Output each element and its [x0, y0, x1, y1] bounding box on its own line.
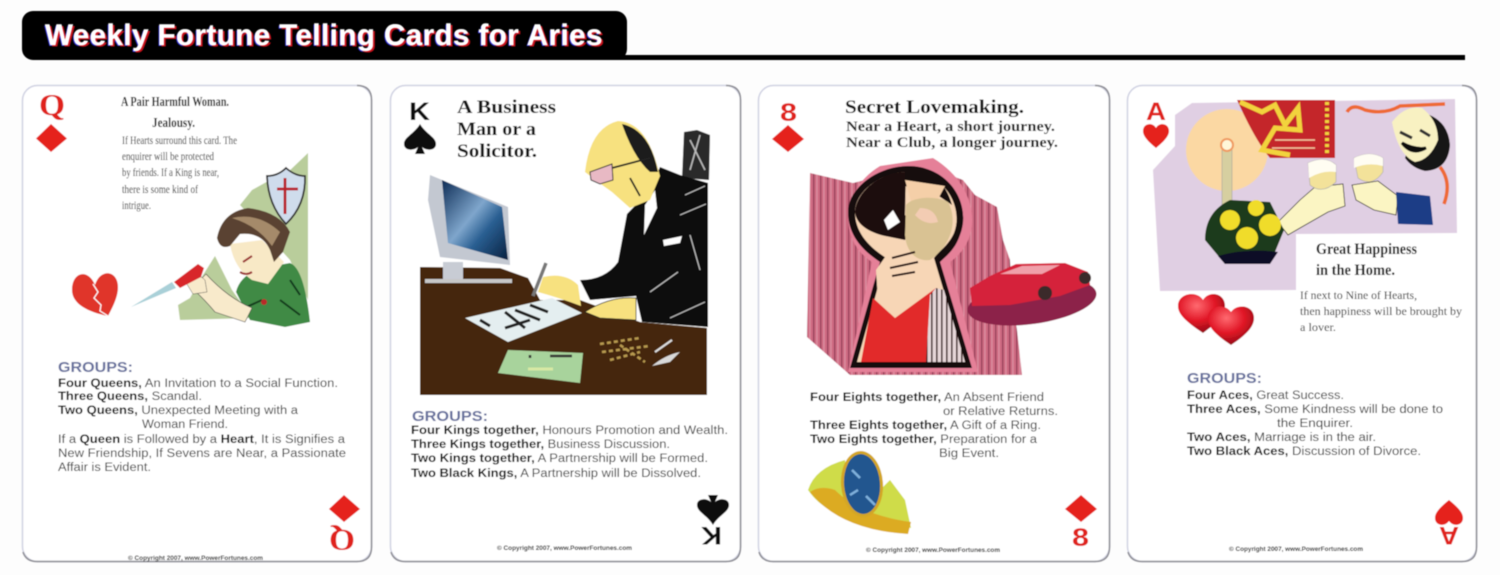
card heading: Jealousy.	[152, 116, 195, 131]
card index: A heart	[1143, 98, 1169, 148]
groups text: If a Queen is Followed by a Heart , It is Signifies a	[58, 434, 346, 446]
groups text: Three Kings together, Business Discussion.	[411, 439, 670, 451]
card description	[1300, 288, 1462, 334]
card description: there is some kind of	[122, 184, 198, 196]
groups text: Big Event.	[939, 448, 999, 460]
groups text: GROUPS:	[412, 408, 488, 425]
bottom index: rotated K spade: K	[701, 521, 722, 549]
groups text	[58, 359, 346, 474]
bottom index: rotated 8 diamond: 8	[1072, 524, 1089, 552]
bottom index: rotated 8 diamond	[1065, 495, 1097, 552]
groups text: Four Eights together, An Absent Friend	[810, 392, 1044, 404]
card description: If Hearts surround this card. The	[122, 135, 237, 147]
panel: king of spades card	[390, 86, 740, 562]
title bar	[22, 11, 1465, 60]
groups text: Three Aces, Some Kindness will be done to	[1187, 404, 1443, 416]
card description	[122, 135, 237, 212]
groups text: Four Aces, Great Success.	[1187, 390, 1344, 402]
bottom index: rotated K spade	[697, 495, 729, 549]
icon: sapphire ring	[808, 450, 911, 534]
card index: A heart: A	[1146, 98, 1166, 126]
copyright: © Copyright 2007, www.PowerFortunes.com	[128, 555, 263, 562]
card description: a lover.	[1300, 320, 1336, 334]
card heading: Solicitor.	[457, 142, 537, 162]
card description: If next to Nine of Hearts,	[1300, 288, 1417, 302]
groups text: Three Eights together, A Gift of a Ring.	[810, 420, 1041, 432]
groups text: Two Queens, Unexpected Meeting with a	[58, 405, 299, 417]
copyright: © Copyright 2007, www.PowerFortunes.com	[866, 547, 1000, 554]
groups text: Two Aces, Marriage is in the air.	[1187, 432, 1376, 444]
card heading: Man or a	[457, 120, 536, 140]
groups text: Two Black Kings, A Partnership will be Dissolved.	[411, 468, 701, 480]
groups text: GROUPS:	[1187, 370, 1262, 387]
card description: by friends. If a King is near,	[122, 167, 219, 179]
card index: 8 diamond: 8	[780, 99, 797, 127]
illustration: woman with dagger	[131, 153, 310, 327]
illustration: toast by candlelight	[1153, 99, 1457, 291]
card heading: Near a Club, a longer journey.	[846, 135, 1058, 151]
groups text: Two Kings together, A Partnership will be Formed.	[411, 453, 708, 465]
card heading: Great Happiness	[1316, 241, 1417, 258]
groups text	[810, 392, 1058, 460]
card heading: in the Home.	[1316, 262, 1395, 279]
card index: K spade: K	[409, 98, 430, 126]
card description: enquirer will be protected	[122, 151, 214, 163]
groups text: Four Kings together, Honours Promotion and Wealth.	[411, 425, 728, 437]
groups text: Affair is Evident.	[58, 462, 151, 474]
groups text: or Relative Returns.	[943, 406, 1058, 418]
icon: two hearts	[1178, 294, 1254, 345]
bottom index: rotated Q diamond	[329, 495, 360, 558]
groups text: Woman Friend.	[142, 419, 228, 431]
card heading: A Business	[457, 98, 556, 118]
panel: eight of diamonds card	[758, 86, 1110, 562]
bottom index: rotated Q diamond: Q	[329, 523, 355, 558]
icon: broken heart	[72, 273, 118, 316]
card heading	[1316, 241, 1417, 279]
groups text: New Friendship, If Sevens are Near, a Passionate	[58, 448, 346, 460]
groups text: Two Eights together, Preparation for a	[810, 434, 1038, 446]
groups text	[411, 408, 728, 480]
card index: K spade	[404, 98, 436, 154]
card description: intrigue.	[122, 200, 151, 212]
car	[965, 271, 1099, 333]
card index: Q diamond: Q	[39, 87, 65, 122]
card heading: Near a Heart, a short journey.	[846, 119, 1055, 135]
illustration: keyhole couple	[807, 158, 1099, 375]
groups text	[1187, 370, 1443, 458]
card heading: A Pair Harmful Woman.	[121, 95, 229, 110]
card heading	[457, 98, 556, 162]
illustration: businessman at desk	[420, 121, 710, 395]
panel: ace of hearts card	[1128, 86, 1476, 562]
groups text: Four Queens, An Invitation to a Social Function.	[58, 378, 338, 390]
groups text: Two Black Aces, Discussion of Divorce.	[1187, 446, 1421, 458]
couple: dark hair	[855, 172, 912, 240]
card index: Q diamond	[36, 87, 67, 152]
title: Weekly Fortune Telling Cards for Aries	[45, 19, 603, 52]
groups text: the Enquirer.	[1277, 418, 1353, 430]
copyright: © Copyright 2007, www.PowerFortunes.com	[497, 545, 632, 552]
copyright: © Copyright 2007, www.PowerFortunes.com	[1229, 546, 1363, 553]
groups text: Three Queens, Scandal.	[58, 391, 202, 403]
card description: then happiness will be brought by	[1300, 304, 1462, 318]
card heading	[845, 98, 1058, 151]
card index: 8 diamond	[772, 99, 804, 152]
bottom index: rotated A heart: A	[1439, 521, 1459, 549]
bottom index: rotated A heart	[1435, 500, 1463, 549]
card heading	[121, 95, 229, 131]
card heading: Secret Lovemaking.	[845, 98, 1024, 118]
panel: queen of diamonds card	[22, 86, 372, 562]
groups text: GROUPS:	[58, 359, 133, 376]
